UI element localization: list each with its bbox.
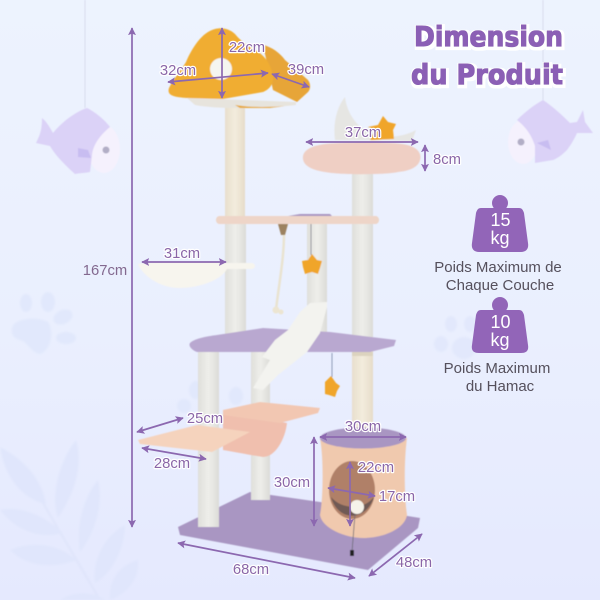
base board bbox=[178, 492, 420, 570]
lower right post bbox=[352, 350, 373, 432]
dimension label 30cm width: 30cm bbox=[345, 419, 381, 435]
arrow: 48cm bbox=[369, 534, 422, 576]
dimension label 167cm: 167cm bbox=[83, 263, 127, 279]
dimension label 68cm: 68cm bbox=[233, 562, 269, 578]
title bbox=[411, 20, 563, 91]
arrow: 30cm condo height bbox=[313, 437, 315, 526]
weight caption: each layer: Poids Maximum de bbox=[434, 259, 562, 276]
upper middle post bbox=[307, 222, 327, 332]
dimension label 25cm: 25cm bbox=[187, 411, 223, 427]
arrow: 37cm bbox=[306, 141, 418, 143]
pink round bed bbox=[303, 142, 420, 174]
pink shelf bbox=[216, 216, 379, 224]
arrow: 30cm condo width bbox=[320, 436, 406, 438]
weight icon 15 kg bbox=[472, 195, 528, 252]
title: du Produit bbox=[411, 58, 563, 91]
purple shelf bbox=[189, 328, 396, 352]
white ramp bbox=[253, 302, 327, 390]
arrow: height 167cm bbox=[131, 28, 133, 527]
decorative paw left bbox=[12, 292, 76, 354]
weight caption: hammock: du Hamac bbox=[466, 378, 535, 395]
weight icon 15 kg: kg bbox=[490, 228, 510, 248]
pink hammock bbox=[223, 412, 287, 457]
arrow: 68cm bbox=[178, 543, 355, 578]
weight icon 10 kg bbox=[472, 297, 528, 353]
lower post overlay bbox=[198, 380, 219, 430]
arrow: 32cm bbox=[168, 73, 268, 82]
weight icon 10 kg: kg bbox=[490, 330, 510, 350]
weight icon 10 kg: 10 bbox=[490, 312, 511, 332]
cloud house front bbox=[169, 28, 273, 99]
arrow: 25cm bbox=[137, 418, 183, 432]
lower left post bbox=[198, 350, 219, 527]
decorative paw right bbox=[434, 316, 476, 359]
arrow: 22cm hole height bbox=[349, 462, 351, 526]
upper left post, cream section bbox=[225, 100, 245, 218]
dimension label 48cm: 48cm bbox=[396, 555, 432, 571]
weight icon 15 kg: 15 bbox=[490, 210, 511, 230]
moon decoration bbox=[334, 97, 416, 141]
upper right post bbox=[352, 170, 373, 344]
weight caption: each layer bbox=[434, 259, 562, 294]
arrow: 17cm hole width bbox=[328, 488, 375, 496]
orange star on bed bbox=[368, 116, 396, 140]
weight caption: each layer: Chaque Couche bbox=[446, 277, 554, 294]
decorative paw centre bbox=[177, 381, 243, 413]
dimension label 32cm: 32cm bbox=[160, 63, 196, 79]
lower middle post bbox=[251, 350, 270, 500]
dimension label 17cm: 17cm bbox=[379, 489, 415, 505]
dimension label 8cm: 8cm bbox=[433, 152, 461, 168]
dimension label 28cm: 28cm bbox=[154, 456, 190, 472]
dimension label 37cm: 37cm bbox=[345, 125, 381, 141]
rope toy bbox=[272, 224, 288, 314]
weight caption: hammock: Poids Maximum bbox=[444, 360, 550, 377]
dimension label 30cm height: 30cm bbox=[274, 475, 310, 491]
lower pink pad bbox=[138, 425, 250, 452]
cat tree bbox=[138, 28, 420, 570]
cloud house hole bbox=[210, 58, 232, 80]
decorative leaf branch bbox=[0, 440, 138, 600]
dimension label 22cm hole: 22cm bbox=[358, 460, 394, 476]
title: Dimension bbox=[414, 20, 563, 53]
lower right post seam bbox=[352, 352, 373, 356]
arrow: 28cm bbox=[142, 448, 206, 459]
upper pink pad bbox=[223, 402, 320, 423]
star toy lower bbox=[325, 353, 340, 397]
cloud house back bbox=[263, 45, 310, 102]
arrow: 8cm bbox=[424, 145, 426, 171]
dimension label 31cm: 31cm bbox=[164, 246, 200, 262]
white hammock bbox=[138, 262, 255, 288]
arrow: 22cm top bbox=[221, 28, 223, 98]
star toy upper bbox=[302, 224, 322, 274]
upper left post, grey section bbox=[225, 222, 246, 336]
weight caption: hammock bbox=[444, 360, 550, 395]
arrow: 39cm bbox=[272, 74, 309, 87]
dimension label 22cm top: 22cm bbox=[229, 40, 265, 56]
hanging fish right bbox=[508, 0, 593, 164]
hanging fish left bbox=[36, 0, 120, 174]
dimension label 39cm: 39cm bbox=[288, 62, 324, 78]
condo bbox=[320, 428, 407, 556]
top cushion underside bbox=[187, 98, 296, 108]
arrow: 31cm bbox=[142, 261, 226, 263]
